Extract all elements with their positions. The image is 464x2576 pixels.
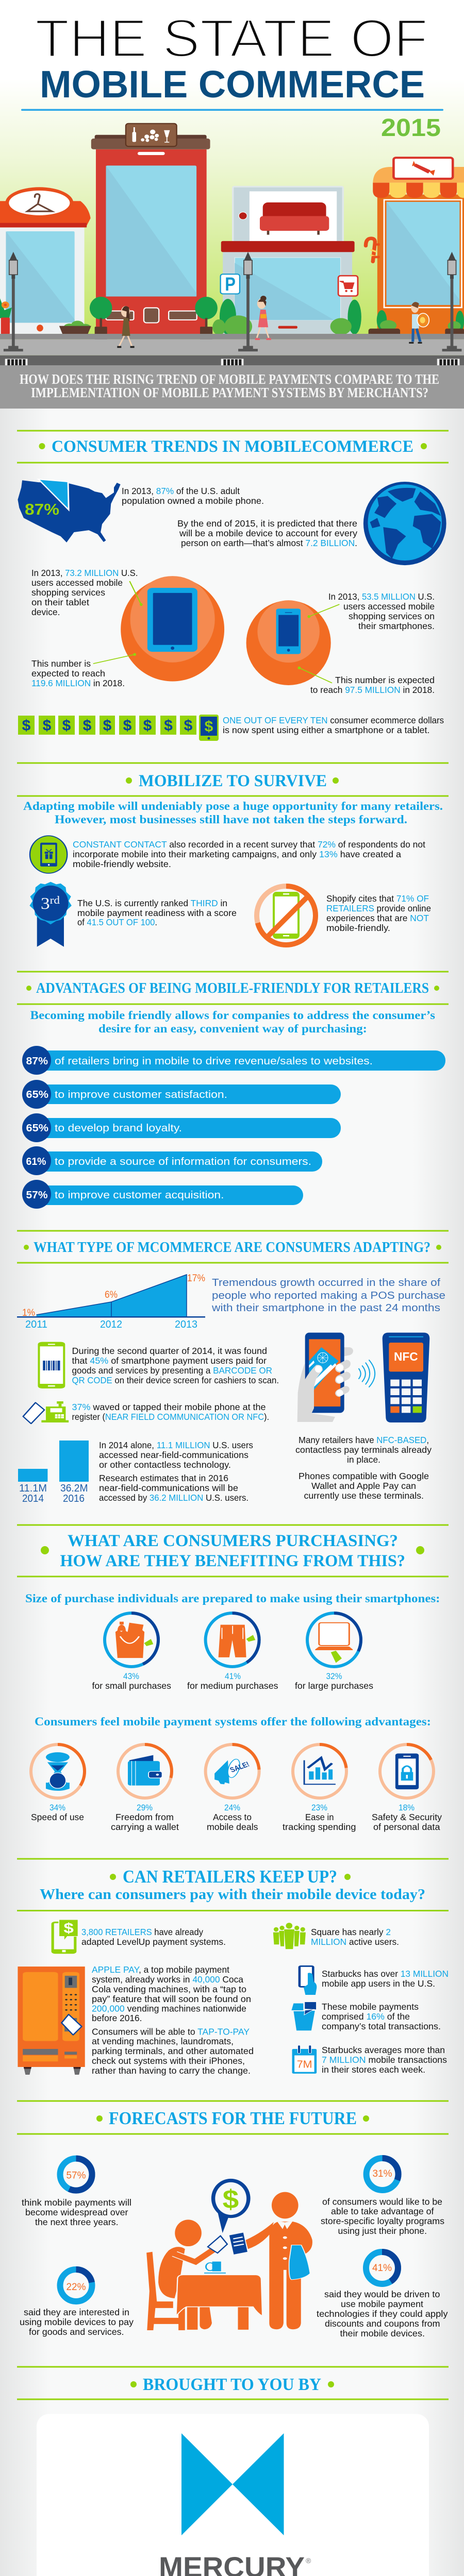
icon row: ten dollars: $ (22, 717, 31, 734)
area chart: POS share growth: 2011 (25, 1319, 47, 1330)
text: third in readiness: mobile payment readiness with a score (77, 908, 237, 918)
text: starbucks transactions: Starbucks averages more than (322, 2045, 445, 2055)
heading: mcommerce types (17, 1230, 449, 1263)
text: starbucks share: These mobile payments (322, 2002, 419, 2012)
text: interested in mobile devices: said they are interested in (24, 2307, 129, 2317)
text: smartphone users: their smartphones. (358, 621, 435, 631)
text: barcode payments: QR CODE on their device screen for cashiers to scan. (72, 1375, 279, 1385)
text: loyalty programs (321, 2197, 444, 2236)
logo: mercury mark (181, 2433, 284, 2535)
icon: phone tapping cash register (23, 1401, 69, 1423)
text: tablet forecast: This number is (31, 658, 91, 669)
donut chart: 22 percent (60, 2269, 92, 2301)
heading: brought to you by (17, 2366, 449, 2400)
ring chart: freedom from wallet: Freedom from (115, 1812, 174, 1822)
plants and trees (0, 297, 464, 343)
text: loyalty programs: able to take advantage of (331, 2206, 434, 2216)
building: furniture store (221, 187, 355, 334)
text: apple pay: rather than having to carry the change. (92, 2065, 251, 2076)
donut chart: 31 percent: 31% (372, 2168, 392, 2179)
text: NFC users: accessed near-field-communications (99, 1450, 248, 1460)
area chart: POS share growth: 2012 (100, 1319, 122, 1330)
heading: brought to you by: BROUGHT TO YOU BY (143, 2375, 321, 2394)
text: tremendous growth: with their smartphone in the past 24 months (211, 1302, 440, 1314)
area chart: POS share growth: 1% (22, 1308, 35, 1318)
text: widespread payments: become widespread over (25, 2207, 128, 2217)
year 2015: 2015 (381, 114, 441, 142)
bar: 65 percent loyalty: to develop brand loyalty. (55, 1123, 182, 1134)
bar: 65 percent satisfaction: to improve customer satisfaction. (55, 1089, 227, 1100)
text: smartphone users: users accessed mobile (343, 601, 435, 612)
text: loyalty programs: of consumers would like to be (322, 2197, 442, 2207)
ring chart: large purchases: for large purchases (295, 1681, 373, 1691)
text: NFC based terminals: Many retailers have NFC-BASED, (299, 1435, 429, 1445)
text: NFC based terminals: in place. (347, 1454, 380, 1465)
pedestrian: woman with pink dress (255, 296, 271, 339)
text: levelup retailers: 3,800 RETAILERS have already (81, 1927, 203, 1937)
text: shopify: Shopify cites that 71% OF (326, 893, 429, 904)
bar: 57 percent (22, 1180, 303, 1209)
text: shopify: RETAILERS provide online (326, 903, 431, 913)
title: the state of: THE STATE OF (35, 9, 428, 69)
title: mobile commerce: MOBILE COMMERCE (40, 63, 425, 106)
panel: brought to you by (17, 2366, 449, 2576)
text: 7.2 billion devices: will be a mobile device to account for every (179, 528, 357, 538)
area chart: POS share growth: 17% (187, 1273, 205, 1284)
icon: coffee cup (291, 2002, 316, 2030)
icon row: ten dollars: $ (83, 717, 92, 734)
text: tremendous growth (211, 1277, 445, 1314)
street scene illustration (0, 124, 464, 365)
leader lines (93, 581, 339, 683)
area chart: POS share growth (17, 1273, 205, 1330)
heading: what are consumers purchasing: HOW ARE THEY BENEFITING FROM THIS? (60, 1552, 405, 1570)
heading: can retailers keep up: CAN RETAILERS KEEP UP? (123, 1867, 337, 1887)
text: constant contact: CONSTANT CONTACT also recorded in a recent survey that 72% of respondents do not (73, 839, 425, 850)
text: starbucks app users: Starbucks has over 13 MILLION (322, 1969, 449, 1979)
text: discounts and coupons: discounts and coupons from (325, 2318, 440, 2329)
text: third in readiness: of 41.5 OUT OF 100. (77, 917, 157, 927)
icon: calendar 7M: 7M (297, 2058, 312, 2070)
pedestrian: woman with brown dress (117, 306, 135, 347)
ring chart: speed of use: Speed of use (31, 1812, 84, 1822)
icon: phone not mobile friendly (257, 886, 316, 945)
text: barcode payments (72, 1346, 279, 1385)
text: apple pay (92, 1964, 254, 2076)
text: discounts and coupons: use mobile payment (341, 2299, 423, 2309)
text: tablet users: shopping services (31, 587, 105, 598)
panel: can retailers keep up (17, 1858, 449, 2076)
text: tablet users: device. (31, 607, 60, 617)
text: constant contact (73, 839, 425, 869)
payment terminal: NFC (394, 1350, 418, 1363)
waiter (245, 2192, 312, 2329)
text: starbucks transactions (322, 2045, 447, 2075)
subheading: advantages felt: Consumers feel mobile payment systems offer the following advantages: (35, 1715, 431, 1728)
text: widespread payments: the next three years. (35, 2217, 119, 2227)
text: 7.2 billion devices: By the end of 2015, it is predicted that there (177, 518, 357, 529)
text: apple pay: before 2016. (92, 2013, 142, 2023)
illustration: customer paying waiter by phone (146, 2179, 312, 2330)
icon: gift on phone (30, 836, 67, 873)
icon: tablet in orange circle (121, 576, 224, 681)
text: starbucks share (322, 2002, 441, 2031)
phone (305, 1333, 344, 1413)
intro question band (0, 365, 464, 409)
text: interested in mobile devices: for goods and services. (29, 2327, 124, 2337)
ring chart: safety and security: Safety & Security (372, 1812, 442, 1822)
payment terminal (383, 1333, 429, 1422)
ring chart: tracking spending: 23% (311, 1803, 327, 1812)
panel: mcommerce types (17, 1230, 449, 1504)
icon: NFC phone and terminal (297, 1333, 429, 1422)
text: tremendous growth: people who reported making a POS purchase (212, 1290, 445, 1301)
text: shopify: experiences that are NOT (326, 913, 429, 923)
heading: can retailers keep up (17, 1858, 449, 1911)
heading: advantages (17, 971, 449, 1005)
icon: vending machine (18, 1967, 85, 2075)
text: levelup retailers: adapted LevelUp payment systems. (81, 1937, 226, 1947)
contactless waves (359, 1360, 375, 1387)
text: apple pay: system, already works in 40,000 Coca (92, 1974, 243, 1985)
text: square users (311, 1927, 399, 1947)
text: smartphone users: In 2013, 53.5 MILLION U.S. (328, 591, 435, 602)
text: 87 percent owned a phone (122, 486, 264, 506)
text: 87 percent owned a phone: In 2013, 87% of the U.S. adult (122, 486, 240, 496)
heading: mobilize to survive: MOBILIZE TO SURVIVE (139, 772, 327, 790)
building: clothing shop (0, 187, 91, 334)
ring chart: small purchases (92, 1613, 171, 1691)
ring chart: small purchases: 43% (123, 1671, 139, 1681)
bar: 65 percent satisfaction (22, 1080, 341, 1109)
ring chart: tracking spending (283, 1744, 356, 1832)
heading: consumer trends: CONSUMER TRENDS IN MOBILECOMMERCE (52, 437, 413, 456)
text: tablet forecast (31, 658, 125, 688)
icon row: ten dollars: $ (43, 717, 52, 734)
sign: shopping cart (338, 276, 358, 296)
donut chart: 41 percent (366, 2252, 398, 2284)
heading: what are consumers purchasing (17, 1524, 449, 1578)
seated customer (146, 2219, 248, 2330)
text: one out of every ten (223, 715, 444, 735)
text: smartphone forecast: This number is expected (335, 675, 435, 685)
ring chart: tracking spending: tracking spending (283, 1822, 356, 1832)
text: tablet forecast: expected to reach (31, 668, 105, 679)
icon: hand tapping tablet (300, 1966, 317, 1995)
text: loyalty programs: using just their phone. (338, 2226, 427, 2236)
icon row: ten dollars: $ (143, 717, 152, 734)
text: apple pay: check out systems with their iPhones, (92, 2056, 245, 2066)
text: smartphone forecast (310, 675, 435, 695)
text: starbucks transactions: in their stores each week. (322, 2064, 425, 2075)
fingers (335, 1360, 351, 1397)
ring chart: freedom from wallet (111, 1744, 179, 1832)
icon row: ten dollars: $ (184, 717, 193, 734)
panel: consumer trends (17, 430, 449, 741)
ring chart: large purchases (295, 1613, 373, 1691)
text: apple pay: APPLE PAY, a top mobile payment (92, 1964, 229, 1975)
bar: 87 percent: 87% (26, 1056, 48, 1067)
street lamps (4, 252, 461, 351)
pedestrian: man with blue shirt (409, 302, 429, 343)
heading: can retailers keep up: Where can consumers pay with their mobile device today? (40, 1886, 425, 1903)
ring chart: freedom from wallet: carrying a wallet (111, 1822, 179, 1832)
phone and receipt (208, 2233, 247, 2255)
text: barcode payments: goods and services by presenting a BARCODE OR (72, 1365, 272, 1376)
wordmark: mercury: ® (306, 2556, 311, 2565)
text: barcode payments: During the second quarter of 2014, it was found (72, 1346, 267, 1356)
heading: what are consumers purchasing: WHAT ARE CONSUMERS PURCHASING? (68, 1532, 398, 1550)
ring chart: small purchases: for small purchases (92, 1681, 171, 1691)
donut chart: 31 percent (367, 2158, 399, 2190)
text: apple pay: Consumers will be able to TAP-TO-PAY (92, 2027, 250, 2037)
bar: 61 percent (22, 1146, 322, 1175)
bar chart: NFC users: 11.1M (19, 1483, 47, 1494)
ring chart: mobile deals: Access to (213, 1812, 252, 1822)
ring chart: safety and security: 18% (399, 1803, 415, 1812)
icon row: ten dollars: $ (123, 717, 132, 734)
text: barcode payments: that 45% of smartphone payment users paid for (72, 1355, 267, 1366)
ring chart: safety and security: of personal data (373, 1822, 440, 1832)
text: discounts and coupons: their mobile devices. (340, 2328, 425, 2338)
bar: 65 percent loyalty (22, 1113, 341, 1142)
icon: third place ribbon: rd (50, 894, 60, 906)
bar: 87 percent: of retailers bring in mobile to drive revenue/sales to websites. (55, 1056, 373, 1067)
heading: mobilize to survive (17, 762, 449, 796)
palm and thumb (297, 1363, 335, 1422)
ring chart: mobile deals: SALE! (228, 1760, 252, 1774)
text: starbucks transactions: 7 MILLION mobile transactions (322, 2055, 447, 2065)
text: NFC based terminals (295, 1435, 432, 1501)
icon row: ten dollars (18, 715, 219, 741)
text: third in readiness: The U.S. is currently ranked THIRD in (77, 898, 227, 908)
text: interested in mobile devices: using mobile devices to pay (20, 2317, 134, 2327)
ring chart: speed of use (31, 1744, 85, 1822)
panel: forecasts (17, 2100, 449, 2338)
text: levelup retailers (81, 1927, 226, 1947)
text: starbucks app users (322, 1969, 449, 1989)
text: near field communication (72, 1402, 269, 1422)
bar chart: NFC users: 2014 (22, 1493, 44, 1504)
heading: forecasts: FORECASTS FOR THE FUTURE (109, 2108, 357, 2128)
text: interested in mobile devices (20, 2307, 134, 2337)
sign: parking: P (225, 274, 236, 295)
speech bubble with dollar: $ (223, 2184, 239, 2214)
title block (21, 9, 443, 142)
ring chart: medium purchases: 41% (225, 1671, 241, 1681)
ring chart: large purchases: 32% (326, 1671, 342, 1681)
text: discounts and coupons (317, 2289, 448, 2338)
ring chart: tracking spending: Ease in (305, 1812, 334, 1822)
sponsor card (37, 2414, 429, 2576)
text: NFC based terminals: Wallet and Apple Pay can (311, 1481, 416, 1491)
bar chart: NFC users (18, 1440, 89, 1504)
icon row: ten dollars: $ (164, 717, 173, 734)
icon row: ten dollars: $ (62, 717, 71, 734)
subheading: becoming mobile friendly: desire for an easy, convenient way of purchasing: (98, 1022, 367, 1035)
text: widespread payments: think mobile payments will (22, 2197, 131, 2208)
panel: mobilize to survive (17, 762, 449, 947)
text: NFC users: near-field-communications will be (99, 1483, 238, 1493)
ring chart: speed of use: 34% (49, 1803, 65, 1812)
text: constant contact: mobile-friendly website. (73, 859, 171, 869)
bar: 65 percent satisfaction: 65% (26, 1089, 48, 1100)
ring chart: freedom from wallet: 29% (137, 1803, 153, 1812)
subheading: becoming mobile friendly: Becoming mobile friendly allows for companies to address the consumer’s (30, 1009, 435, 1022)
text: shopify (326, 893, 431, 933)
text: NFC users: or other contactless technology. (99, 1460, 231, 1470)
question text (20, 371, 439, 400)
text: constant contact: incorporate mobile into their marketing campaigns, and only 13% have created a (73, 849, 401, 859)
text: NFC based terminals: contactless pay terminals already (295, 1445, 432, 1455)
icon: phone with dollar bubble (53, 1920, 78, 1954)
text: near field communication: 37% waved or tapped their mobile phone at the (72, 1402, 266, 1412)
ring chart: safety and security (372, 1744, 442, 1832)
ring chart: mobile deals: 24% (224, 1803, 240, 1812)
text: square users: Square has nearly 2 (311, 1927, 391, 1937)
bar chart: NFC users: 2016 (63, 1493, 85, 1504)
ring chart: mobile deals (206, 1744, 259, 1832)
bar: 65 percent loyalty: 65% (26, 1123, 48, 1134)
text: tablet users (31, 568, 138, 617)
text: apple pay: pay” feature that will soon be found on (92, 1994, 251, 2004)
text: starbucks share: comprised 16% of the (322, 2011, 410, 2022)
subheading: size of purchase: Size of purchase individuals are prepared to make using their smartphones: (25, 1592, 440, 1605)
text: widespread payments (22, 2197, 131, 2227)
ring chart: medium purchases: for medium purchases (187, 1681, 278, 1691)
bar: 61 percent: 61% (26, 1156, 46, 1167)
hand behind phone (344, 1347, 353, 1357)
text: 7.2 billion devices (177, 518, 357, 548)
text: tablet users: users accessed mobile (31, 578, 123, 588)
icon: barcode on phone (38, 1342, 65, 1388)
icon: smartphone in orange circle (246, 600, 331, 685)
text: one out of every ten: ONE OUT OF EVERY TEN consumer ecommerce dollars (223, 715, 444, 725)
subheading: becoming mobile friendly (30, 1009, 435, 1035)
text: tablet users: In 2013, 73.2 MILLION U.S. (31, 568, 138, 578)
text: square users: MILLION active users. (311, 1937, 399, 1947)
panel: what consumers purchase (17, 1524, 449, 1832)
text: apple pay: at vending machines, laundromats, (92, 2036, 234, 2046)
table and cup (176, 2262, 262, 2316)
text: NFC users (99, 1440, 253, 1503)
icon row: ten dollars: $ (205, 718, 213, 735)
map: USA 87 percent: 87% (25, 500, 59, 518)
text: one out of every ten: is now spent using either a smartphone or a tablet. (223, 725, 430, 735)
subheading: adapting mobile: However, most businesses still have not taken the steps forward. (55, 813, 407, 826)
ring chart: medium purchases (187, 1613, 278, 1691)
text: NFC users: accessed by 36.2 MILLION U.S. users. (99, 1493, 248, 1503)
donut chart: 57 percent: 57% (66, 2170, 86, 2181)
icon row: ten dollars: $ (103, 717, 112, 734)
icon: phone with dollar bubble: $ (63, 1920, 74, 1936)
text: smartphone forecast: to reach 97.5 MILLION in 2018. (310, 685, 435, 695)
text: shopify: mobile-friendly. (326, 923, 390, 933)
heading: forecasts (17, 2100, 449, 2135)
text: discounts and coupons: said they would be driven to (324, 2289, 440, 2299)
bar: 61 percent: to provide a source of information for consumers. (55, 1156, 311, 1167)
heading: consumer trends (17, 430, 449, 464)
subheading: adapting mobile: Adapting mobile will undeniably pose a huge opportunity for many retailers. (23, 800, 443, 812)
text: smartphone users: shopping services on (349, 611, 435, 621)
bar chart: NFC users: 36.2M (60, 1483, 88, 1494)
bar: 57 percent: 57% (26, 1190, 48, 1201)
icon: third place ribbon: 3 (41, 894, 49, 912)
text: starbucks share: company’s total transactions. (322, 2021, 441, 2031)
panel: advantages for retailers (17, 971, 449, 1209)
icon: globe (363, 482, 446, 565)
text: starbucks app users: mobile app users in the U.S. (322, 1978, 435, 1989)
text: tablet forecast: 119.6 MILLION in 2018. (31, 678, 125, 688)
text: NFC based terminals: Phones compatible with Google (299, 1471, 429, 1481)
text: tremendous growth: Tremendous growth occurred in the share of (212, 1277, 440, 1289)
text: 7.2 billion devices: person on earth—that’s almost 7.2 BILLION. (181, 538, 357, 548)
text: apple pay: Cola vending machines, with a “tap to (92, 1984, 246, 1994)
sign: candy cane (366, 239, 379, 262)
text: apple pay: 200,000 vending machines nationwide (92, 2003, 246, 2013)
bar: 87 percent (22, 1046, 445, 1075)
text: NFC based terminals: currently use these terminals. (304, 1490, 424, 1501)
sidewalk and road (0, 334, 464, 365)
donut chart: 41 percent: 41% (372, 2263, 392, 2274)
ring chart: mobile deals: mobile deals (207, 1822, 258, 1832)
building: wine shop phone (91, 124, 210, 334)
text: third in readiness (77, 898, 237, 927)
speech bubble with dollar (211, 2179, 251, 2233)
donut chart: 22 percent: 22% (66, 2282, 86, 2293)
text: discounts and coupons: technologies if they could apply (317, 2309, 448, 2319)
area chart: POS share growth: 6% (105, 1290, 118, 1300)
heading: advantages: ADVANTAGES OF BEING MOBILE-FRIENDLY FOR RETAILERS (36, 980, 429, 996)
text: tablet users: on their tablet (31, 597, 89, 607)
text: smartphone users (328, 591, 435, 631)
text: NFC users: In 2014 alone, 11.1 MILLION U.S. users (99, 1440, 253, 1450)
text: apple pay: parking terminals, and other automated (92, 2046, 254, 2056)
subheading: adapting mobile (23, 800, 443, 826)
map: USA 87 percent (18, 479, 121, 543)
text: NFC users: Research estimates that in 2016 (99, 1473, 228, 1483)
bar: 57 percent: to improve customer acquisition. (55, 1190, 224, 1201)
building: candy store (373, 158, 464, 334)
icon: group of people (273, 1923, 306, 1949)
icon: third place ribbon (29, 882, 72, 947)
donut chart: 57 percent (60, 2159, 92, 2191)
area chart: POS share growth: 2013 (175, 1319, 197, 1330)
text: loyalty programs: store-specific loyalty programs (321, 2216, 444, 2226)
text: 87 percent owned a phone: population owned a mobile phone. (122, 496, 264, 506)
text: near field communication: register (NEAR FIELD COMMUNICATION OR NFC). (72, 1412, 269, 1422)
icon: calendar 7M (292, 2045, 317, 2074)
